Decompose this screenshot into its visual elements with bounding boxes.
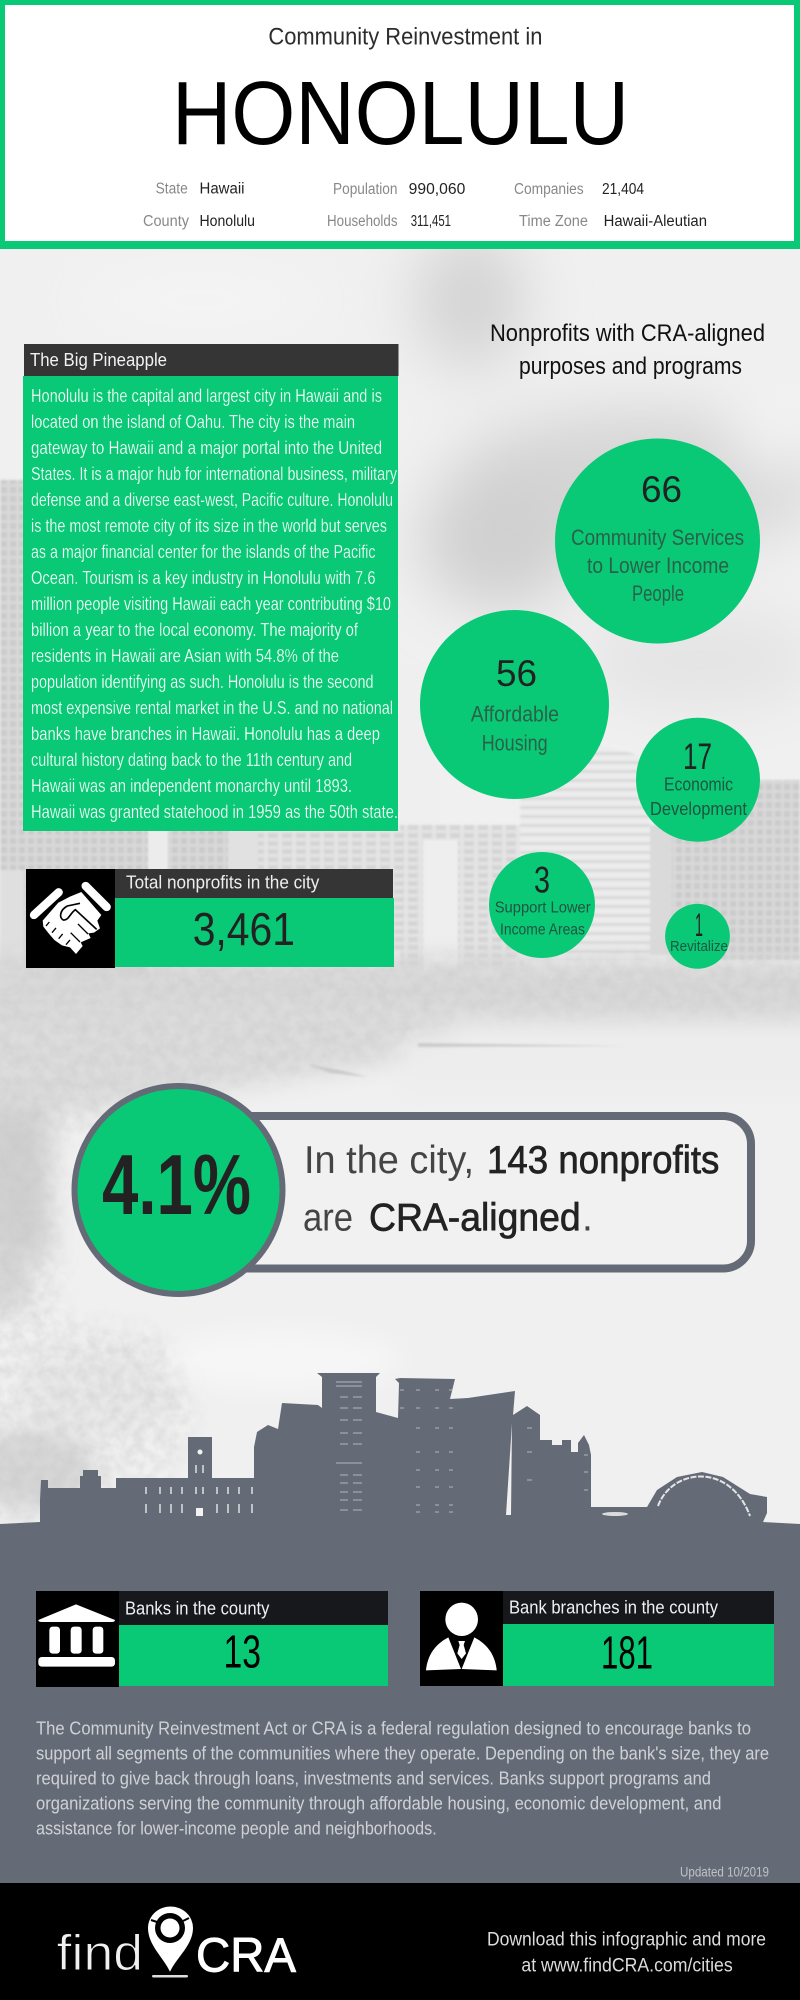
stat: companies: 21,404 [602,181,644,198]
footer [0,1883,800,2000]
card label: Banks in the county [125,1598,269,1618]
stat: time zone: Time Zone [519,213,588,230]
callout sentence: In the city, [304,1139,474,1182]
icon: map pin [148,1906,193,1978]
bubble: revitalize [665,904,730,969]
stat: population: 990,060 [409,181,466,198]
city buildings [0,480,800,980]
stat: population [333,181,466,198]
bottom section background [0,1530,800,1883]
stat: companies [514,181,644,198]
card: banks in the county [36,1591,388,1687]
text block: about the CRA: organizations serving the community through affordable housing, economic development, and [36,1792,721,1813]
stat: time zone [519,213,707,230]
callout: 4.1% CRA-aligned [74,1086,751,1294]
stat: households: Households [327,213,398,230]
callout sentence: CRA-aligned [369,1196,581,1239]
city name: HONOLULU [172,64,629,164]
bubble: community services: 66 [641,469,682,510]
bubble: community services: to Lower Income [587,553,729,578]
bubble: community services [555,438,760,644]
heading: nonprofits with CRA-aligned purposes [490,320,765,380]
skyline silhouette [0,1373,800,1540]
stat: companies: Companies [514,181,584,198]
bubble: affordable housing [420,610,609,799]
bubble: community services: Community Services [571,525,744,550]
card label: Total nonprofits in the city [126,872,319,892]
card label: Bank branches in the county [509,1597,718,1617]
footer download text: at www.findCRA.com/cities [521,1955,733,1977]
bubble: support lower income areas: Income Areas [500,922,585,939]
panel body text: States. It is a major hub for international business, military [31,464,397,484]
panel body text: residents in Hawaii are Asian with 54.8% of the [31,646,339,666]
panel body text: banks have branches in Hawaii. Honolulu has a deep [31,724,380,744]
bubble: economic development: Development [650,798,747,819]
panel body text: Honolulu is the capital and largest city in Hawaii and is [31,386,382,406]
bubble: support lower income areas: Support Lower [495,900,591,917]
bubble: economic development: 17 [683,736,712,777]
logo: findCRA [57,1906,296,1983]
panel body text: Hawaii was granted statehood in 1959 as the 50th state. [31,802,398,822]
stat: state: Hawaii [200,180,244,197]
callout sentence [303,1139,719,1239]
callout sentence: . [582,1196,593,1239]
bubble: revitalize: Revitalize [670,938,728,955]
panel body text: Ocean. Tourism is a key industry in Honolulu with 7.6 [31,568,376,588]
panel body text: cultural history dating back to the 11th century and [31,750,352,770]
heading: nonprofits with CRA-aligned purposes: purposes and programs [519,353,742,380]
bubble: affordable housing: Housing [482,731,548,756]
stat: state [156,180,244,197]
panel body text: is the most remote city of its size in the world but serves [31,516,387,536]
footer download text: Download this infographic and more [487,1929,766,1951]
panel body text: defense and a diverse east-west, Pacific culture. Honolulu [31,490,393,510]
panel body text: most expensive rental market in the U.S. and no national [31,698,393,718]
icon: handshake [34,886,107,954]
text block: about the CRA: required to give back through loans, investments and services. Banks support programs and [36,1767,711,1788]
text block: about the CRA [36,1717,769,1838]
card: total nonprofits [26,869,394,968]
card number: 13 [224,1626,261,1678]
panel heading: The Big Pineapple [30,350,167,370]
logo: findCRA: CRA [196,1930,296,1983]
logo: findCRA: find [57,1925,143,1981]
icon: bank building [38,1604,115,1667]
bubble: revitalize: 1 [695,907,703,943]
stat: population: Population [333,181,398,198]
heading: nonprofits with CRA-aligned purposes: Nonprofits with CRA-aligned [490,320,765,347]
stat: county [143,213,255,230]
bubble: affordable housing: Affordable [471,702,559,727]
bubble: economic development [636,718,760,842]
panel: The Big Pineapple [23,344,398,831]
bubble: affordable housing: 56 [496,653,537,694]
panel body text: million people visiting Hawaii each year contributing $10 [31,594,391,614]
stat: county: County [143,213,189,230]
panel body text: population identifying as such. Honolulu is the second [31,672,374,692]
big percentage: 4.1% [102,1138,251,1233]
stat: county: Honolulu [200,213,255,230]
updated date: Updated 10/2019 [680,1865,769,1880]
card number: 181 [601,1627,653,1679]
tree band and beach [0,960,800,1510]
panel body text: located on the island of Oahu. The city is the main [31,412,355,432]
callout sentence: 143 nonprofits [487,1139,719,1182]
bubble: support lower income areas: 3 [534,860,550,901]
footer download text [487,1929,766,1977]
skyline windows [336,1382,588,1512]
stat: households [327,213,451,230]
bubble: community services: People [632,581,684,606]
card: bank branches in the county [420,1591,774,1686]
icon: person in suit [426,1603,497,1670]
background: grayscale city and beach photo [0,230,800,1539]
panel body text: billion a year to the local economy. The majority of [31,620,359,640]
panel body text: gateway to Hawaii and a major portal into the United [31,438,382,458]
callout sentence: are [303,1196,353,1239]
panel body text: Hawaii was an independent monarchy until 1893. [31,776,352,796]
stat: time zone: Hawaii-Aleutian [604,213,707,230]
text block: about the CRA: assistance for lower-income people and neighborhoods. [36,1817,437,1838]
card number: 3,461 [193,903,295,955]
panel body text: as a major financial center for the islands of the Pacific [31,542,376,562]
bubble: economic development: Economic [664,774,733,795]
title line: Community Reinvestment in [268,23,542,50]
panel body text [31,386,398,822]
stat: households: 311,451 [411,213,451,230]
bubble: support lower income areas [489,852,595,958]
stat: state: State [156,180,188,197]
header panel [0,0,800,249]
